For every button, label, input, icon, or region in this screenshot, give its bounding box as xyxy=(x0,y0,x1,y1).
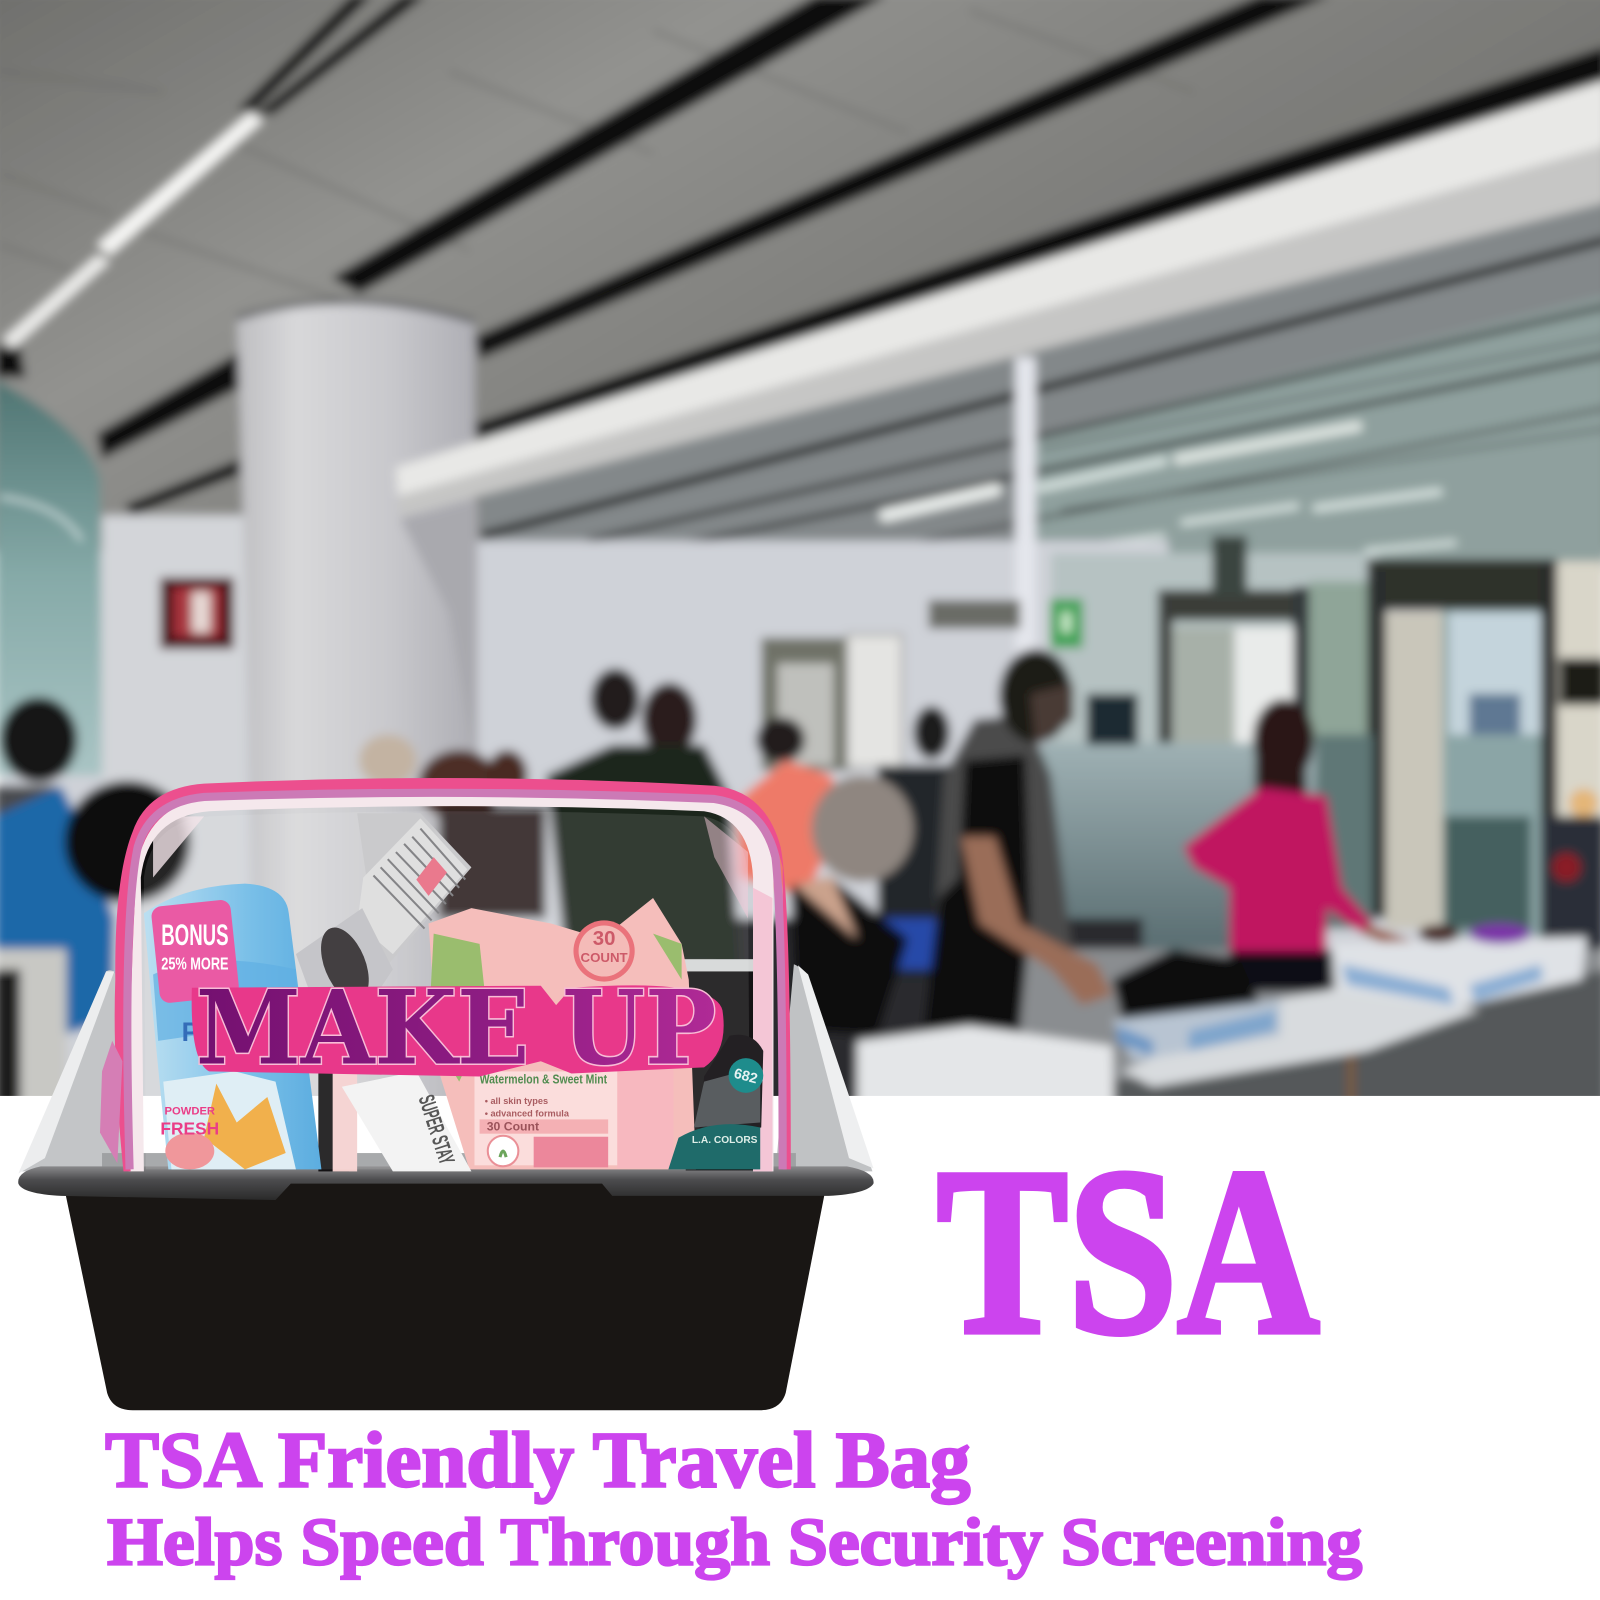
zipper pull xyxy=(100,1041,122,1163)
nail polish bottle: L.A. COLORS xyxy=(692,1135,758,1146)
signage xyxy=(929,600,1020,629)
coral shirt xyxy=(756,717,805,762)
woman in magenta xyxy=(1253,699,1314,781)
walls xyxy=(102,515,245,1128)
make up patch xyxy=(192,968,724,1088)
base under the scene xyxy=(0,510,1600,1122)
queue behind bag xyxy=(591,668,640,730)
TSA large heading: TSA xyxy=(937,1119,1319,1384)
security screening tray xyxy=(18,959,874,1410)
facial wipes pack: 30 Count xyxy=(487,1120,539,1134)
left glass curve xyxy=(0,380,102,776)
dark tray interior behind contents xyxy=(318,1061,349,1171)
dark figure xyxy=(913,706,950,759)
dry shampoo can: PO xyxy=(182,1017,220,1047)
headline: TSA Friendly Travel Bag: TSA Friendly Travel Bag xyxy=(105,1417,971,1505)
comb xyxy=(296,813,471,1020)
dry shampoo can xyxy=(144,884,321,1169)
facial wipes pack: Watermelon & Sweet Mint xyxy=(480,1072,608,1087)
clear window film tint xyxy=(144,811,750,1169)
far ceiling xyxy=(480,82,1600,571)
white lower panel xyxy=(0,1096,1600,1600)
near gate xyxy=(1367,559,1556,610)
ceiling xyxy=(0,0,1600,551)
facial wipes pack: COUNT xyxy=(581,950,628,965)
bonus badge: BONUS xyxy=(161,919,229,952)
bins and belongings xyxy=(1122,985,1480,1087)
center gate xyxy=(1158,590,1311,620)
tray rim xyxy=(18,1166,874,1200)
ceiling light strips xyxy=(97,112,263,255)
dry shampoo can: POWDER xyxy=(165,1105,215,1117)
tray body xyxy=(61,1173,829,1410)
facial wipes pack: 30 xyxy=(593,928,615,950)
make up lettering: MAKE UP xyxy=(196,968,716,1088)
vertical pole xyxy=(1015,357,1036,663)
far gate xyxy=(761,638,853,770)
column xyxy=(237,302,474,1112)
checkpoint counter xyxy=(1112,969,1600,1122)
subheadline: Helps Speed Through Security Screening: Helps Speed Through Security Screening xyxy=(107,1504,1362,1579)
bonus badge: 25% MORE xyxy=(161,953,229,973)
white soffit beam xyxy=(396,80,1600,516)
foundation tube xyxy=(333,1066,471,1171)
dark zone under queue xyxy=(714,918,1143,1112)
red exit sign xyxy=(160,578,234,649)
people in the queue xyxy=(0,649,1418,1122)
white mesh inner seam xyxy=(129,794,773,1171)
man in black xyxy=(934,714,1071,949)
frosted glass partition xyxy=(1041,743,1316,957)
background photo: airport security checkpoint xyxy=(0,0,1600,1128)
facial wipes pack xyxy=(429,898,696,1169)
clear pink makeup bag xyxy=(100,778,791,1171)
left traveller xyxy=(0,697,78,783)
patch pink backing xyxy=(192,985,724,1077)
nail polish bottle: 682 xyxy=(732,1066,759,1087)
facial wipes pack: • all skin types xyxy=(485,1096,548,1106)
facial wipes pack: • advanced formula xyxy=(485,1108,570,1118)
bonus badge xyxy=(151,899,240,1004)
dry shampoo can: FRESH xyxy=(160,1119,219,1139)
pink binding and glitter piping xyxy=(115,778,791,1171)
nail polish bottle xyxy=(668,1035,763,1169)
older woman xyxy=(791,878,908,1036)
ceiling beams xyxy=(0,0,1600,515)
foundation tube: SUPER STAY xyxy=(414,1092,459,1167)
tray inner walls xyxy=(20,970,133,1171)
